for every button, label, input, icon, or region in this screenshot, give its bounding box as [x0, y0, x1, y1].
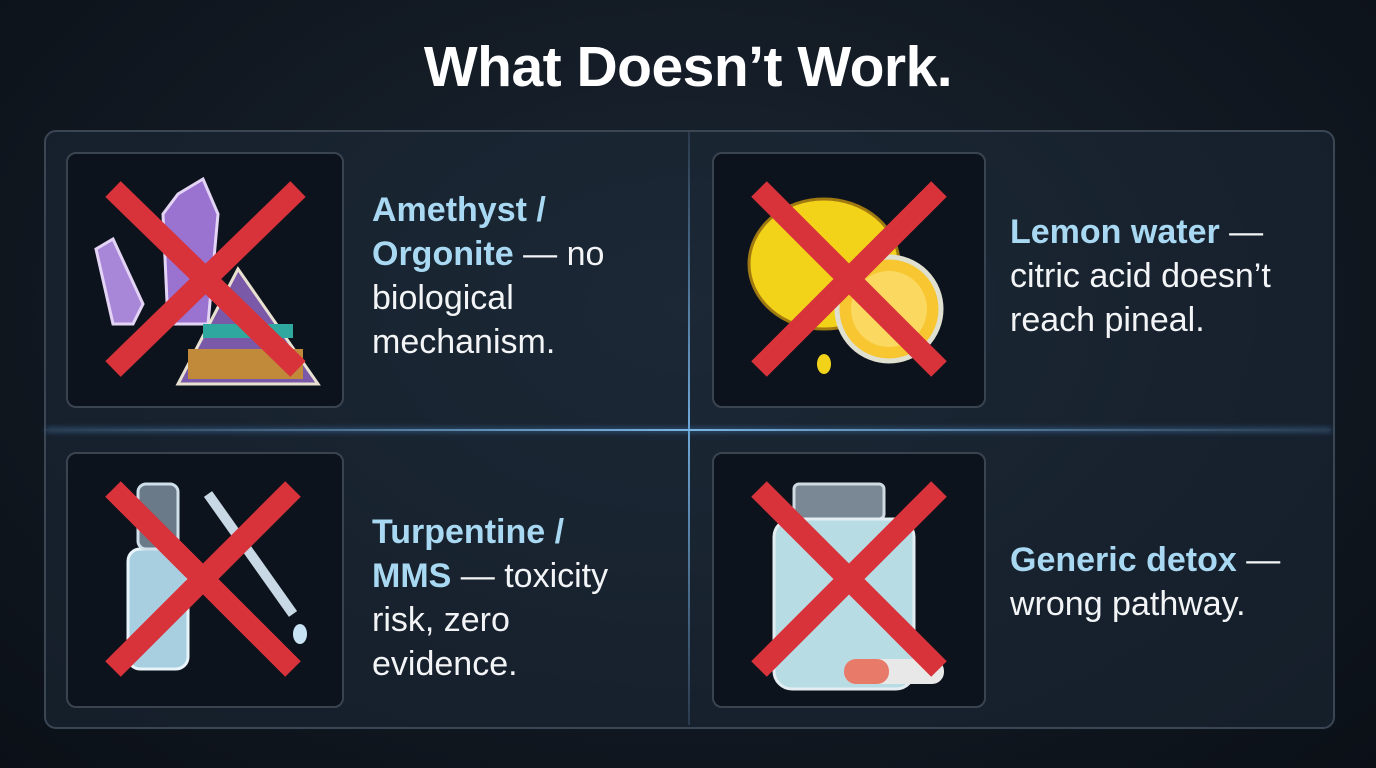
text: lemon water: [1010, 213, 1271, 339]
text: generic detox: [1010, 541, 1280, 623]
text: amethyst: Orgonite — no: [372, 235, 604, 273]
text: lemon water: Lemon water —: [1010, 213, 1263, 251]
text: lemon water: citric acid doesn’t: [1010, 257, 1271, 295]
text: turpentine: MMS — toxicity: [372, 557, 608, 595]
icon: lemon crossed: [712, 152, 986, 408]
panel: main grid: [44, 130, 1335, 729]
text: turpentine: Turpentine /: [372, 513, 564, 551]
text: generic detox: Generic detox —: [1010, 541, 1280, 579]
icon: supplement jar crossed: [712, 452, 986, 708]
text: turpentine: [372, 513, 608, 683]
text: amethyst: mechanism.: [372, 323, 555, 361]
text: turpentine: evidence.: [372, 645, 518, 683]
text: amethyst: [372, 191, 604, 361]
title: What Doesn’t Work.: [424, 35, 952, 99]
text: generic detox: wrong pathway.: [1010, 585, 1246, 623]
text: turpentine: risk, zero: [372, 601, 510, 639]
icon: crystals crossed: [66, 152, 344, 408]
icon: dropper bottles crossed: [66, 452, 344, 708]
text: lemon water: reach pineal.: [1010, 301, 1205, 339]
text: amethyst: Amethyst /: [372, 191, 546, 229]
text: amethyst: biological: [372, 279, 514, 317]
